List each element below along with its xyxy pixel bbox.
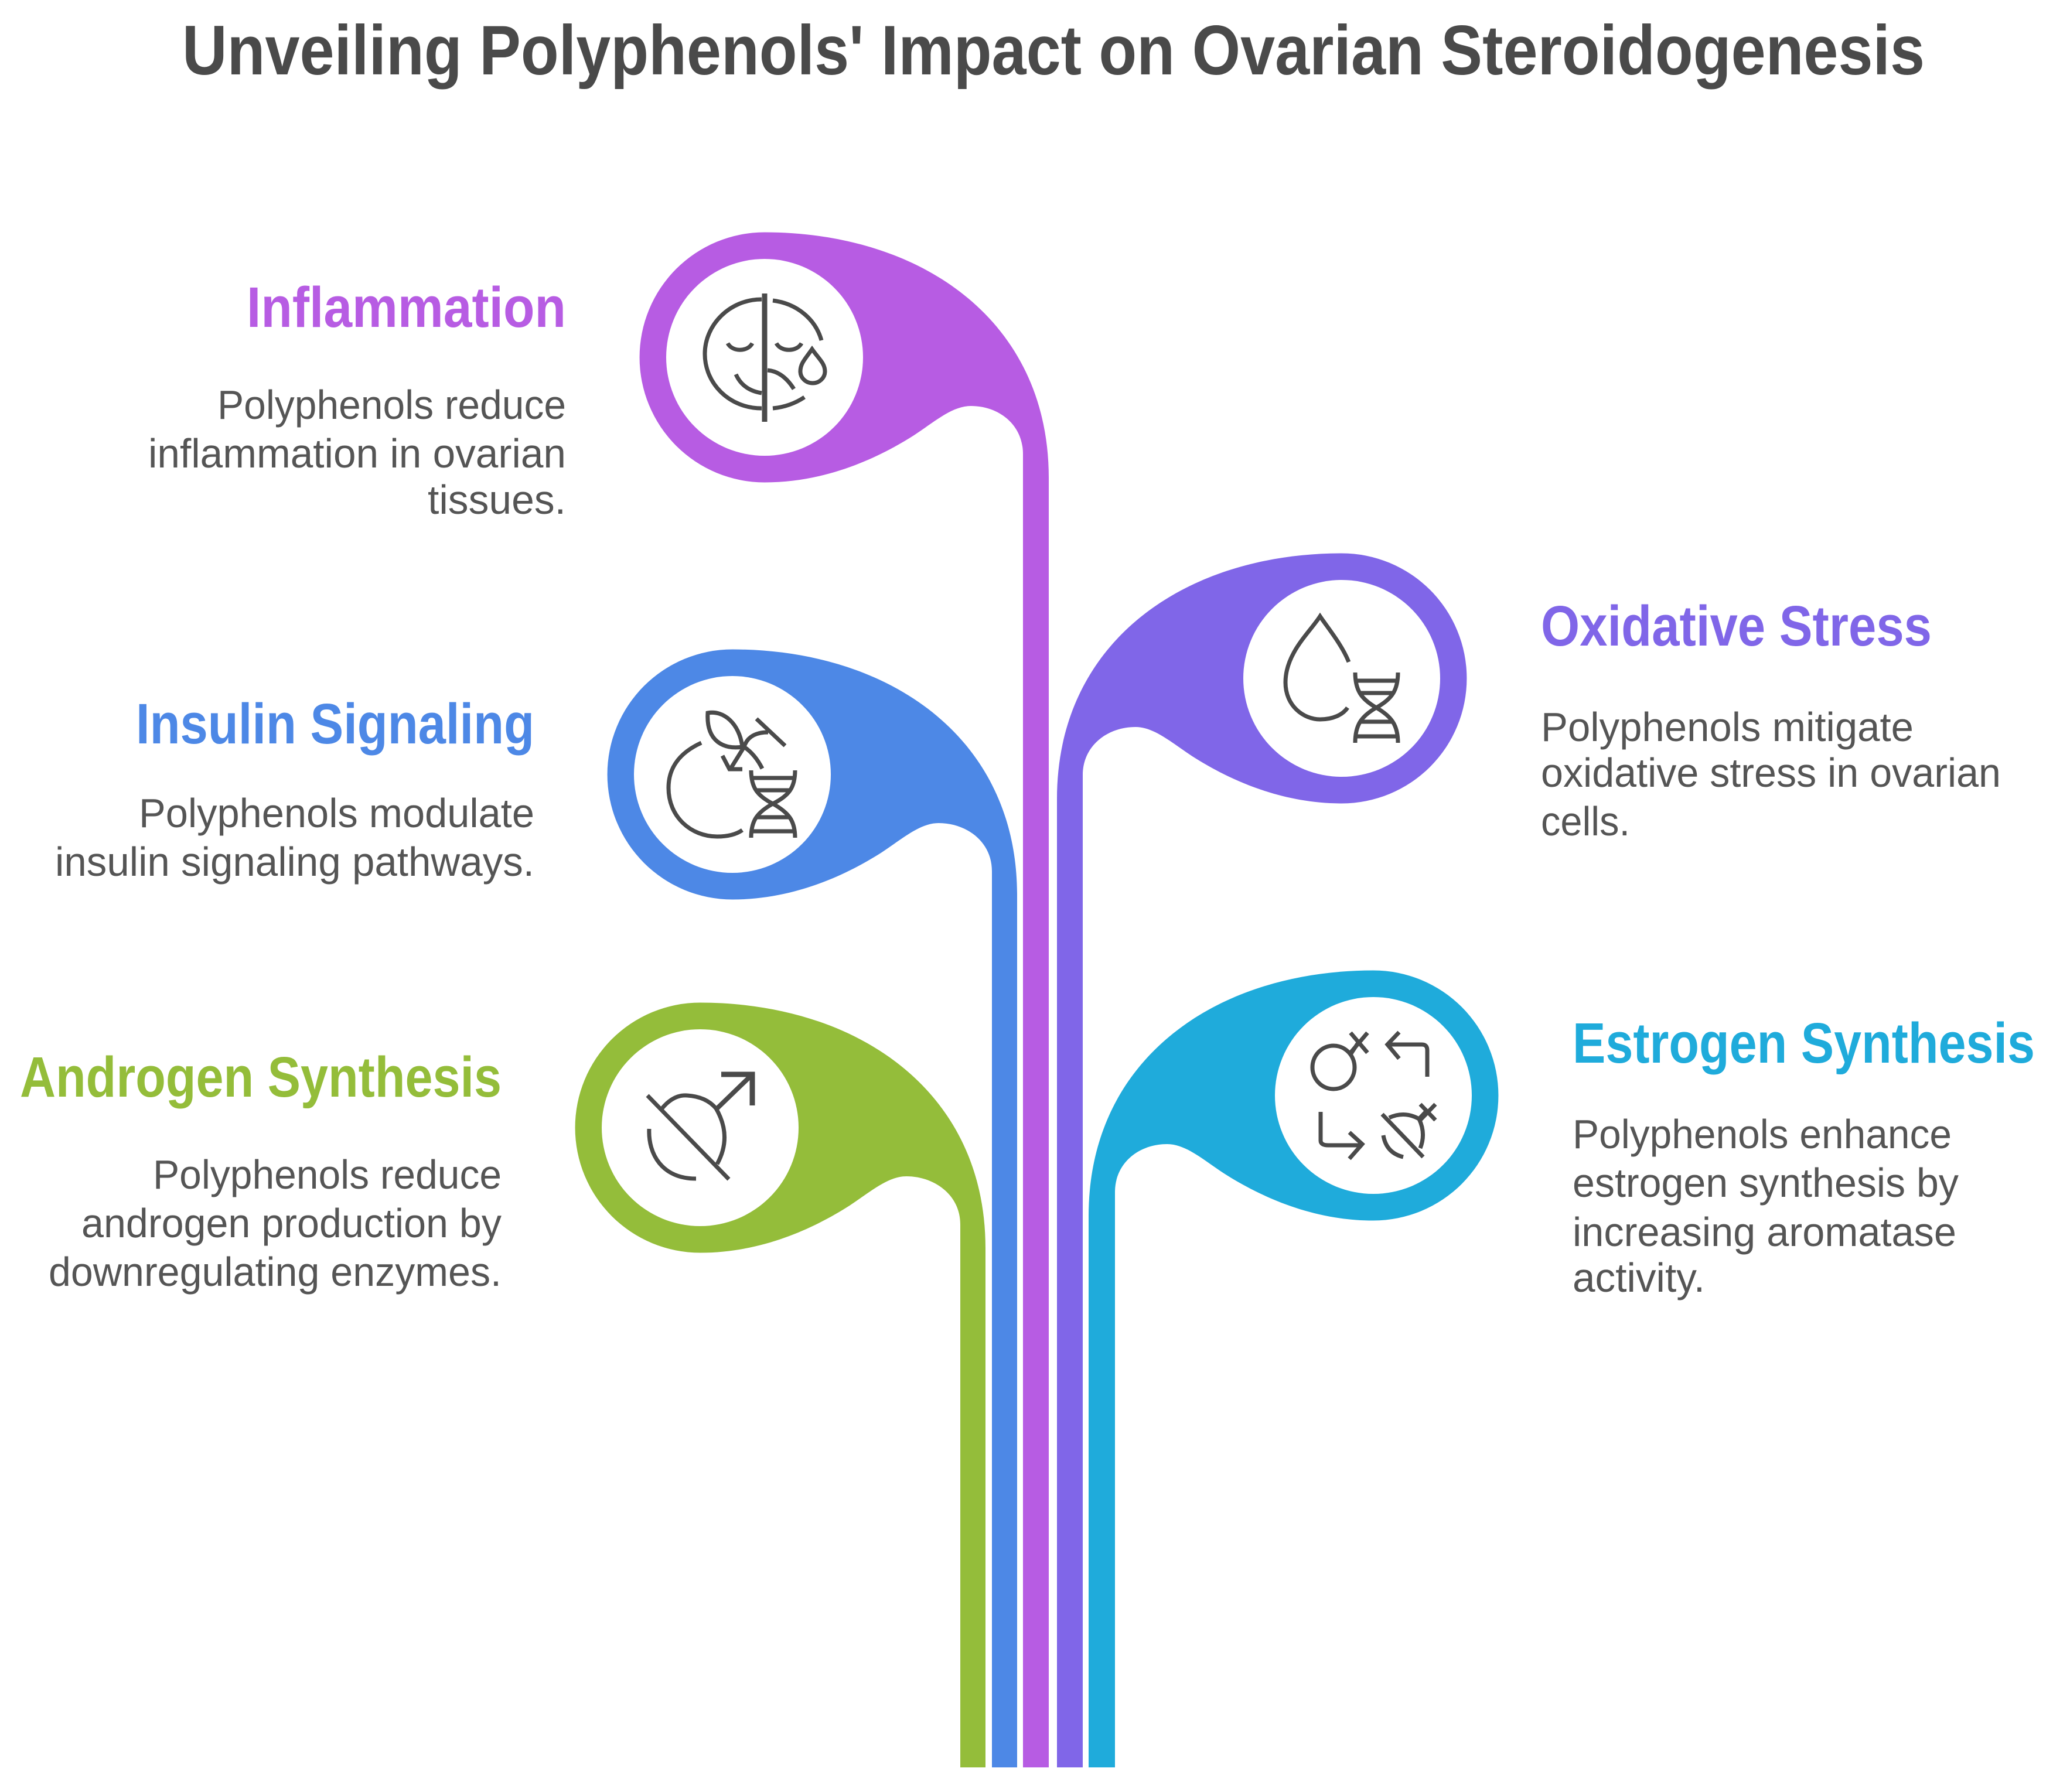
text: estrogen synthesis description — [1573, 1111, 1959, 1301]
text: estrogen synthesis description: activity. — [1573, 1255, 1705, 1301]
stem and bulb: estrogen synthesis — [1089, 970, 1498, 1767]
heading: androgen synthesis: Androgen Synthesis — [20, 1045, 502, 1109]
icon: water drop and DNA — [1243, 580, 1440, 777]
text: inflammation description: Polyphenols reduce — [217, 382, 566, 428]
icon: hormone conversion symbols — [1275, 997, 1472, 1194]
text: androgen synthesis description — [49, 1152, 502, 1295]
text: oxidative stress description: oxidative stress in ovarian — [1541, 750, 2001, 796]
panel: insulin signaling — [55, 649, 1017, 1767]
text: androgen synthesis description: downregulating enzymes. — [49, 1249, 502, 1295]
panel: inflammation — [148, 232, 1049, 1767]
panel: oxidative stress — [1057, 553, 2001, 1767]
text: estrogen synthesis description: increasing aromatase — [1573, 1209, 1956, 1255]
panel: androgen synthesis — [20, 1003, 985, 1767]
icon: apple and DNA — [634, 676, 831, 873]
text: inflammation description — [148, 382, 566, 523]
text: androgen synthesis description: Polyphenols reduce — [153, 1152, 502, 1197]
text: inflammation description: inflammation in ovarian — [148, 431, 566, 476]
icon: half happy half sad face — [666, 259, 863, 456]
text: insulin signaling description — [55, 790, 534, 885]
text: insulin signaling description: insulin signaling pathways. — [55, 839, 534, 885]
icon: crossed male symbol — [602, 1029, 799, 1226]
stem and bulb: oxidative stress — [1057, 553, 1467, 1767]
heading: oxidative stress: Oxidative Stress — [1541, 594, 1932, 658]
text: estrogen synthesis description: estrogen synthesis by — [1573, 1160, 1959, 1206]
stem and bulb: inflammation — [640, 232, 1049, 1767]
text: inflammation description: tissues. — [428, 477, 566, 523]
text: oxidative stress description: Polyphenols mitigate — [1541, 704, 1914, 750]
text: insulin signaling description: Polyphenols modulate — [139, 790, 534, 836]
text: estrogen synthesis description: Polyphenols enhance — [1573, 1111, 1952, 1157]
text: oxidative stress description — [1541, 704, 2001, 844]
panel: estrogen synthesis — [1089, 970, 2035, 1767]
text: androgen synthesis description: androgen production by — [81, 1200, 502, 1246]
text: oxidative stress description: cells. — [1541, 798, 1630, 844]
heading: inflammation: Inflammation — [247, 275, 566, 339]
stem and bulb: insulin signaling — [608, 649, 1017, 1767]
stem and bulb: androgen synthesis — [575, 1003, 985, 1767]
heading: insulin signaling: Insulin Signaling — [136, 692, 534, 756]
